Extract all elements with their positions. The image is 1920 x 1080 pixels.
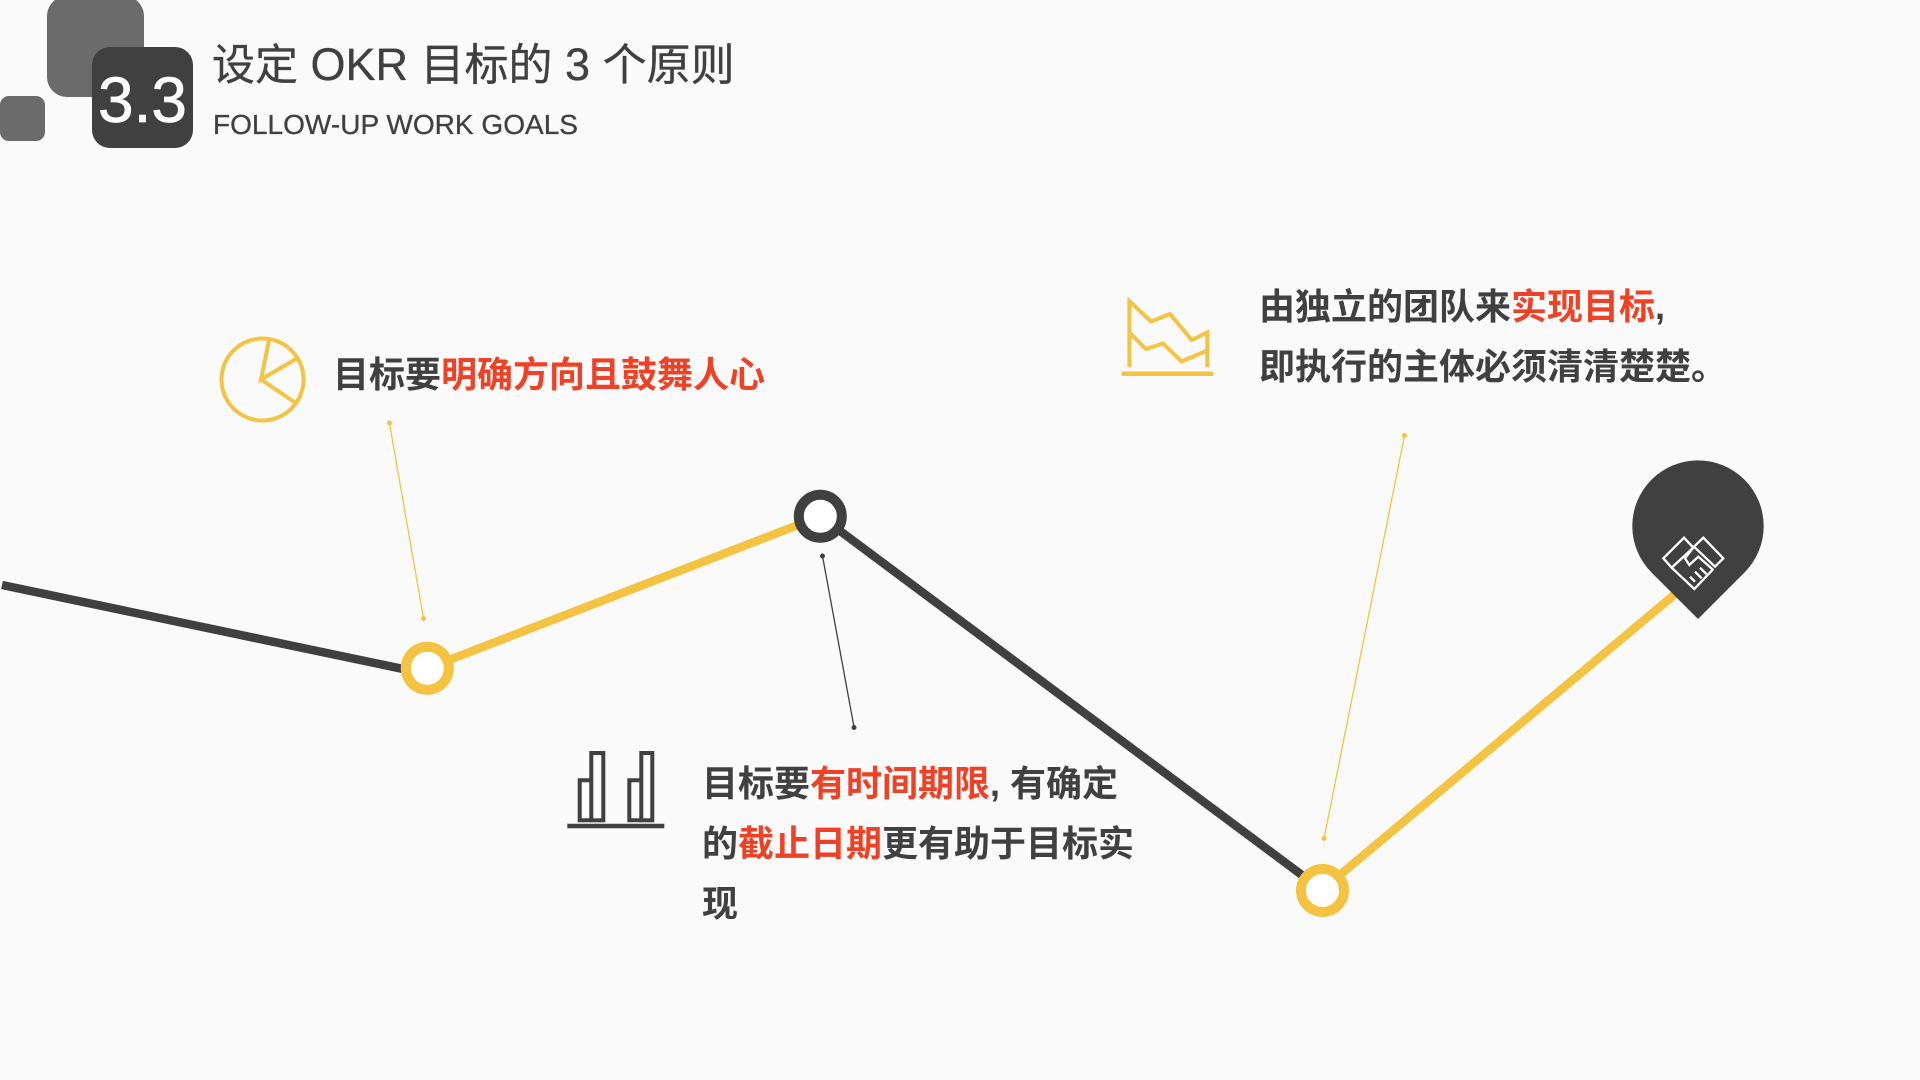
- end pin with handshake icon: [1632, 460, 1764, 619]
- header badge: 3.3: [0, 0, 193, 148]
- text: principle 2: 现: [702, 883, 738, 924]
- title: 设定 OKR 目标的 3 个原则: [212, 39, 735, 90]
- text: principle 3: 由独立的团队来实现目标,: [1259, 286, 1665, 327]
- icon: bar chart: [567, 753, 664, 826]
- timeline path: [2, 516, 1680, 890]
- icon: pie chart: [222, 338, 304, 420]
- text: principle 1: 目标要明确方向且鼓舞人心: [333, 354, 765, 395]
- timeline node: yellow 2: [1301, 869, 1344, 912]
- text: principle 3: 即执行的主体必须清清楚楚。: [1259, 346, 1727, 387]
- subtitle: FOLLOW-UP WORK GOALS: [213, 109, 578, 140]
- icon: area chart: [1122, 301, 1213, 374]
- connector line 3: [1322, 434, 1406, 840]
- timeline node: yellow 1: [406, 647, 449, 690]
- connector line 1: [387, 421, 426, 620]
- text: principle 2: 目标要有时间期限, 有确定: [702, 763, 1118, 804]
- header badge: 3.3: 3.3: [98, 64, 187, 136]
- text: principle 2: 的截止日期更有助于目标实: [702, 823, 1134, 864]
- connector line 2: [820, 554, 856, 730]
- timeline node: dark: [799, 495, 842, 538]
